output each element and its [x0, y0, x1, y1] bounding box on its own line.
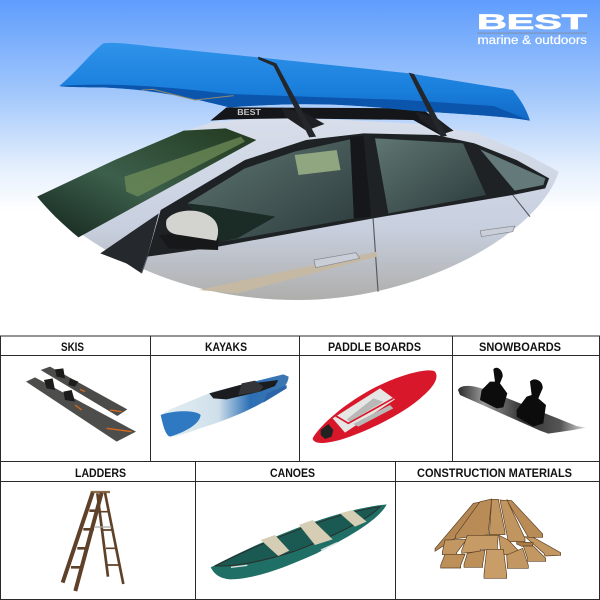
kayak: [59, 43, 530, 121]
heading: LADDERS: [75, 466, 126, 480]
windshield reflection: [124, 137, 245, 197]
table grid: [0, 336, 600, 600]
front quarter dark trim: [100, 213, 159, 273]
kayak rim cord: [142, 89, 233, 100]
logo tagline: marine & outdoors: [478, 35, 587, 47]
tree reflection: [187, 203, 276, 242]
panel: kayaks: [161, 340, 289, 437]
logo rule: [477, 32, 587, 34]
rear door handle: [480, 226, 515, 237]
front side window: [187, 139, 354, 242]
back planks: [435, 499, 561, 556]
roof rack pads: [210, 107, 453, 135]
front planks: [441, 554, 465, 568]
photo: car with kayak on roof: [37, 43, 559, 300]
icon: skis: [26, 367, 136, 442]
icon: canoe: [211, 504, 387, 579]
logo wordmark: BEST: [477, 11, 587, 34]
kayak hull shadow: [59, 85, 530, 121]
interior seat reflection: [295, 150, 341, 175]
heading: CONSTRUCTION MATERIALS: [417, 466, 572, 480]
front strap: [258, 57, 316, 137]
icon: paddle board: [313, 370, 436, 443]
heading: PADDLE BOARDS: [328, 340, 421, 354]
panel: canoes: [211, 466, 387, 579]
pad logo: BEST: [237, 108, 262, 117]
icon: lumber stack: [435, 499, 561, 578]
windshield: [37, 128, 256, 237]
side mirror: [159, 211, 218, 250]
panel: ladders: [63, 466, 126, 591]
B pillar: [350, 136, 371, 218]
middle planks: [442, 539, 467, 555]
heading: KAYAKS: [205, 340, 247, 354]
rear strap: [409, 73, 447, 137]
panel: snowboards: [458, 340, 586, 434]
rear side window: [375, 138, 486, 213]
icon: kayak: [161, 374, 289, 437]
icon: snowboard: [458, 368, 586, 434]
door seam lines: [142, 195, 530, 292]
panel: skis: [26, 340, 136, 442]
front door handle: [314, 253, 360, 268]
icon: ladder: [63, 492, 123, 591]
heading: CANOES: [270, 466, 315, 480]
logo: BEST marine & outdoors: [477, 11, 588, 47]
panel: construction materials: [417, 466, 572, 578]
heading: SNOWBOARDS: [479, 340, 561, 354]
sky background: [0, 0, 600, 212]
rear quarter window: [480, 149, 545, 191]
car body: [37, 117, 559, 300]
window frame: [147, 133, 549, 257]
logo wordmark shadow: BEST: [478, 12, 588, 35]
heading: SKIS: [61, 340, 84, 354]
beige reflection stripe: [199, 252, 377, 293]
panel: paddle boards: [313, 340, 436, 443]
